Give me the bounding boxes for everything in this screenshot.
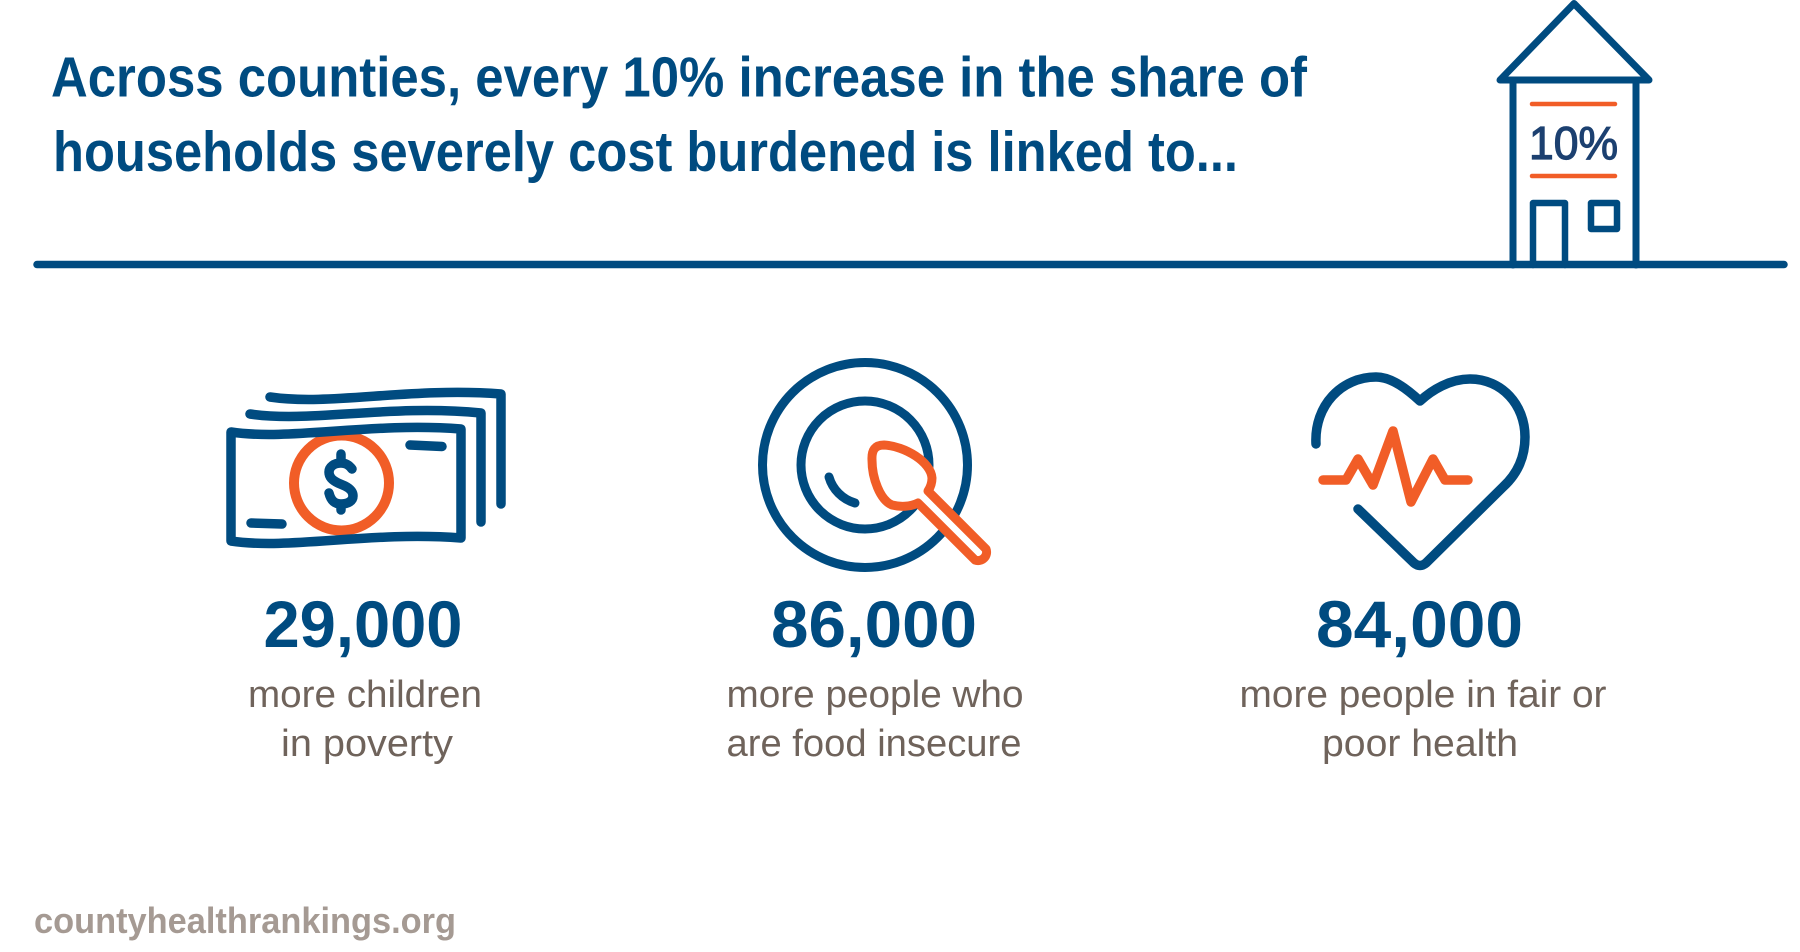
description: food insecure: more people who	[726, 674, 1024, 716]
description: food insecure: are food insecure	[726, 723, 1022, 765]
stat: 84,000: 84,000	[1316, 587, 1523, 661]
title	[51, 46, 1308, 184]
icon: heart with pulse	[1316, 377, 1525, 566]
icon: plate and spoon	[762, 362, 987, 568]
description: food insecure	[726, 674, 1024, 765]
icon: house with 10%: 10%	[1529, 117, 1618, 169]
description: fair or poor health: poor health	[1322, 723, 1518, 765]
description: fair or poor health	[1240, 674, 1607, 765]
title: Across counties, every 10% increase in the share of	[51, 46, 1308, 110]
icon: house with 10%	[1500, 4, 1649, 265]
icon: money stack	[231, 392, 501, 543]
panel: food insecure	[726, 362, 1024, 765]
stat: 86,000: 86,000	[771, 587, 977, 661]
stat: 29,000: 29,000	[264, 587, 462, 661]
description: children in poverty: more children	[248, 674, 482, 716]
footer source url: countyhealthrankings.org	[34, 900, 456, 941]
description: children in poverty	[248, 674, 482, 765]
panel: children in poverty	[231, 392, 501, 765]
title: households severely cost burdened is linked to...	[53, 120, 1238, 184]
description: fair or poor health: more people in fair or	[1240, 674, 1607, 716]
panel: fair or poor health	[1240, 377, 1607, 765]
ground line	[37, 261, 1784, 268]
description: children in poverty: in poverty	[281, 723, 453, 765]
